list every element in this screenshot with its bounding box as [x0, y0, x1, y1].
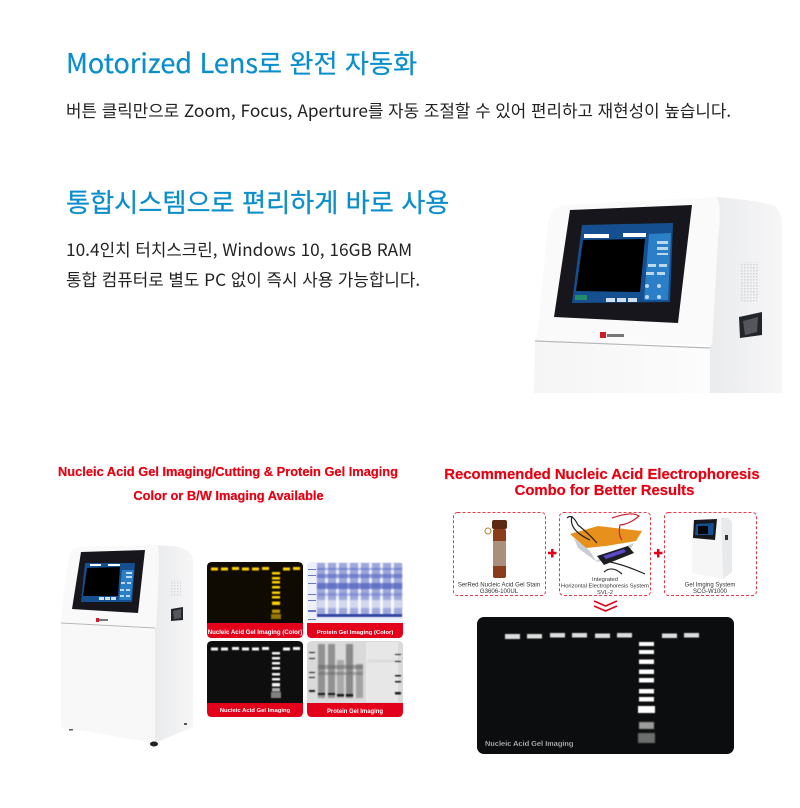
heading: combo red title: Recommended Nucleic Acid Electrophoresis	[444, 467, 760, 483]
gel panel: protein color	[307, 562, 403, 638]
gel panel: large nucleic acid gel	[477, 617, 734, 754]
gel panel: nucleic acid black and white: Nucleic Acid Gel Imaging	[220, 708, 291, 714]
text: integrated system description: 통합 컴퓨터로 별도 PC 없이 즉시 사용 가능합니다.	[66, 266, 420, 291]
icon: plus	[548, 549, 556, 558]
combo box: electrophoresis system: Horizontal Electrophoresis System	[561, 584, 649, 590]
text: integrated system description: 10.4인치 터치스크린, Windows 10, 16GB RAM	[66, 236, 412, 261]
text: motorized lens description: 버튼 클릭만으로 Zoom, Focus, Aperture를 자동 조절할 수 있어 편리하고 재현성이 높습니다.	[66, 97, 731, 122]
gel panel: protein black and white: Protein Gel Imaging	[327, 709, 383, 715]
combo box: electrophoresis system: SVL-2	[597, 590, 613, 596]
combo box: nucleic acid gel stain: G3606-100UL	[480, 588, 519, 595]
combo box: electrophoresis system	[560, 512, 650, 596]
gel panel: large nucleic acid gel: Nucleic Acid Gel Imaging	[485, 739, 574, 748]
heading: integrated system: 통합시스템으로 편리하게 바로 사용	[66, 182, 449, 220]
combo box: nucleic acid gel stain	[454, 512, 546, 596]
heading: gel imaging red title: Nucleic Acid Gel Imaging/Cutting & Protein Gel Imaging	[58, 464, 398, 479]
combo box: gel imaging system: SCG-W1000	[693, 589, 728, 595]
heading: motorized lens: Motorized Lens로 완전 자동화	[66, 42, 417, 81]
gel panel: protein color: Protein Gel Imaging (Color)	[317, 630, 393, 636]
product photo: imaging system close-up	[534, 197, 782, 393]
combo box: gel imaging system	[664, 512, 756, 596]
heading: gel imaging red title	[58, 464, 398, 503]
text: integrated system description	[66, 236, 420, 291]
icon: plus	[654, 549, 662, 558]
combo box: gel imaging system: Gel Imging System	[685, 582, 735, 588]
combo box: nucleic acid gel stain: SerRed Nucleic Acid Gel Stain	[458, 582, 540, 588]
heading: combo red title	[444, 467, 760, 499]
product photo: imaging system full	[61, 545, 193, 746]
heading: combo red title: Combo for Better Results	[515, 483, 694, 499]
gel panel: nucleic acid black and white	[207, 641, 303, 717]
combo box: electrophoresis system: Integrated	[592, 577, 618, 583]
icon: double chevron down	[594, 601, 617, 611]
gel panel: nucleic acid color: Nucleic Acid Gel Imaging (Color)	[208, 629, 302, 636]
gel panel: protein black and white	[307, 641, 403, 717]
heading: gel imaging red title: Color or B/W Imaging Available	[133, 488, 324, 503]
gel panel: nucleic acid color	[207, 562, 303, 638]
